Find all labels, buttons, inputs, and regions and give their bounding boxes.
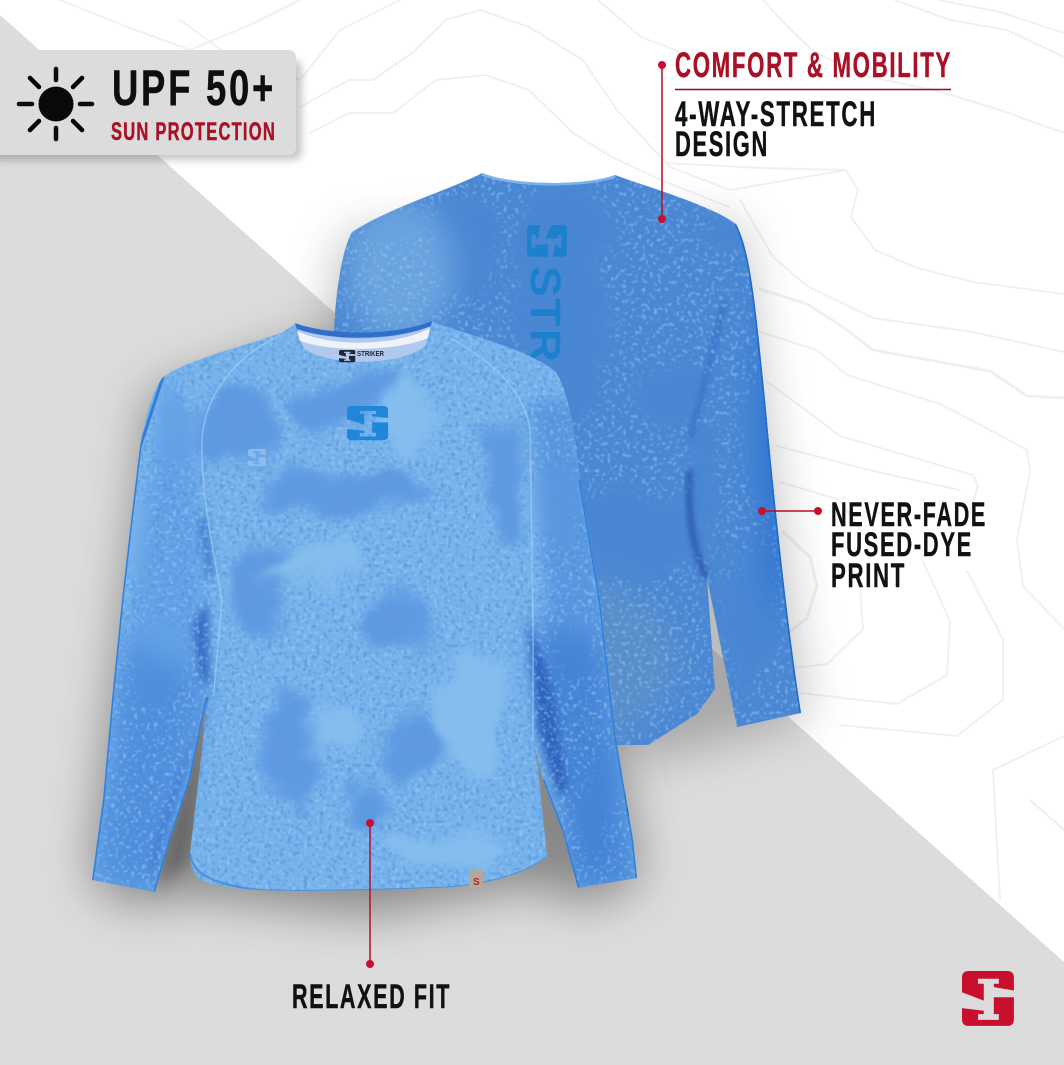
- callout: comfort and mobility: 4-WAY-STRETCH: [675, 95, 877, 134]
- callout: relaxed fit: [292, 819, 451, 1016]
- badge subheading: SUN PROTECTION: [111, 118, 276, 146]
- faint S print: [248, 449, 266, 466]
- callout: never-fade print: [758, 496, 987, 595]
- hem tag: [469, 870, 483, 888]
- callout: comfort and mobility: DESIGN: [675, 125, 769, 164]
- sleeve tones: [90, 370, 640, 900]
- back print: vertical logo: [527, 225, 567, 257]
- front shirt: [80, 310, 650, 900]
- dark folds: [150, 510, 568, 885]
- badge: UPF 50+ sun protection: [0, 50, 302, 160]
- seams: [202, 337, 533, 740]
- callout: never-fade print: PRINT: [831, 557, 906, 595]
- callout: comfort and mobility: [658, 46, 952, 223]
- brand S logo: [962, 971, 1014, 1026]
- back shirt: [334, 173, 801, 745]
- topographic contour lines: [60, 0, 1064, 900]
- icon: sun: [19, 69, 92, 139]
- callout: relaxed fit: RELAXED FIT: [292, 978, 451, 1016]
- solid camouflage patches: [196, 376, 529, 872]
- shirt shadows: [90, 225, 805, 915]
- sleeve print stripe: [623, 781, 629, 816]
- badge heading: UPF 50+: [112, 60, 276, 116]
- neck label: STRIKER: [357, 351, 384, 358]
- callout: never-fade print: FUSED-DYE: [831, 526, 973, 564]
- hem tag: S: [473, 877, 480, 888]
- back print: wordmark: STR: [521, 266, 569, 364]
- chest S logo: [347, 406, 388, 440]
- collar and inner neck: [295, 321, 432, 362]
